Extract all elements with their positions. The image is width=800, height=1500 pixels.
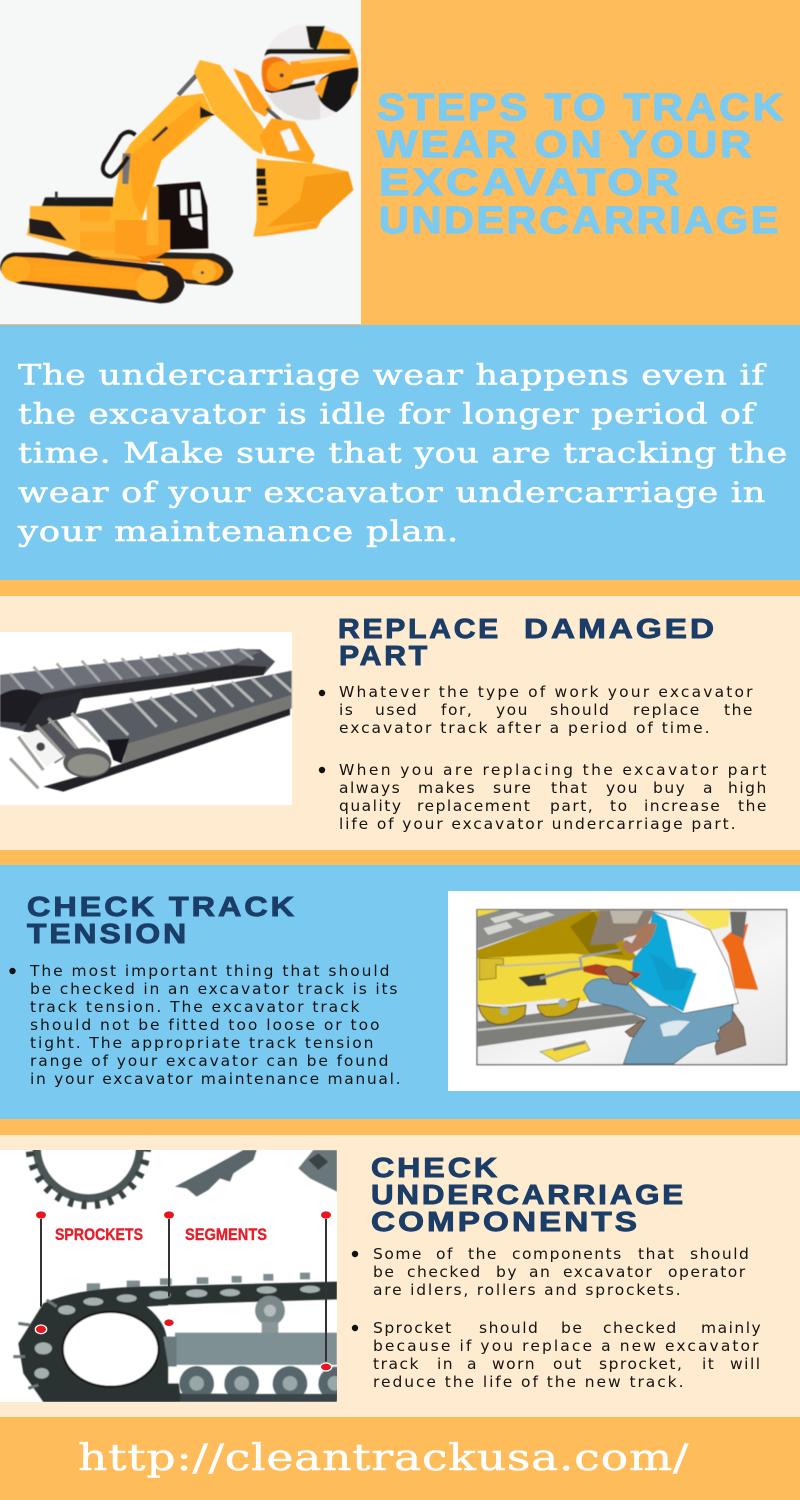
bullet list: because if you replace a new excavator — [373, 1337, 760, 1355]
bullet list: will — [730, 1355, 762, 1373]
bullet list: checked — [407, 1263, 482, 1281]
bullet list: Whatever the type of work your excavator — [339, 683, 754, 701]
panel: check undercarriage components — [0, 1088, 800, 1417]
bullet list: tight. The appropriate track tension — [30, 1034, 375, 1052]
bullet list: quality — [339, 797, 403, 815]
bullet list: is — [339, 701, 354, 719]
bullet list: used — [375, 701, 418, 719]
bullet list: always — [339, 779, 401, 797]
panel: header — [0, 0, 800, 325]
bullet list: high — [728, 779, 768, 797]
bullet list: excavator — [563, 1263, 653, 1281]
bullet list: mainly — [701, 1319, 762, 1337]
label: segments: SEGMENTS — [185, 1225, 267, 1244]
heading — [371, 1152, 686, 1237]
bullet list: components — [512, 1245, 623, 1263]
bullet list: reduce the life of the new track. — [373, 1373, 685, 1391]
bullet list: an — [529, 1263, 551, 1281]
bullet list — [9, 962, 402, 1088]
bullet list: you — [496, 701, 529, 719]
bullet list: range of your excavator can be found — [30, 1052, 390, 1070]
bullet list: excavator track after a period of time. — [339, 719, 711, 737]
bullet list: to — [610, 797, 629, 815]
bullet list: buy — [653, 779, 686, 797]
heading: COMPONENTS — [371, 1206, 640, 1237]
title: UNDERCARRIAGE — [379, 200, 781, 242]
bullet list: that — [638, 1245, 675, 1263]
panel: intro — [0, 325, 800, 580]
panel: replace damaged part — [0, 596, 800, 850]
intro text: the excavator is idle for longer period of — [18, 398, 757, 430]
bullet list: the — [468, 1245, 498, 1263]
bullet list: out — [553, 1355, 583, 1373]
bullet list: should not be fitted too loose or too — [30, 1016, 381, 1034]
label: sprockets: SPROCKETS — [55, 1225, 143, 1244]
bullet list: replacement — [417, 797, 531, 815]
bullet list: Some — [373, 1245, 423, 1263]
bullet list: sprocket, — [599, 1355, 683, 1373]
bullet list: by — [496, 1263, 518, 1281]
bullet list: The most important thing that should — [29, 962, 391, 980]
heading: PART — [339, 640, 430, 671]
title: WEAR ON YOUR — [377, 124, 754, 166]
image: mechanic greasing track — [448, 891, 800, 1091]
bullet list: in your excavator maintenance manual. — [30, 1070, 402, 1088]
bullet list: you — [606, 779, 639, 797]
title: STEPS TO TRACK — [377, 87, 786, 129]
bullet list: a — [467, 1355, 478, 1373]
intro text — [17, 358, 788, 548]
heading — [338, 613, 717, 671]
intro text: wear of your excavator undercarriage in — [18, 476, 766, 509]
panel: check track tension — [0, 865, 800, 1119]
bullet list: track tension. The excavator track — [30, 998, 361, 1016]
bullet list: be — [373, 1263, 395, 1281]
title: EXCAVATOR — [379, 162, 682, 204]
bullet list: increase — [644, 797, 721, 815]
intro text: time. Make sure that you are tracking the — [18, 436, 788, 470]
bullet list: are idlers, rollers and sprockets. — [373, 1281, 682, 1299]
bullet list: for, — [441, 701, 473, 719]
bullet list: it — [702, 1355, 715, 1373]
heading: DAMAGED — [524, 613, 717, 644]
heading: UNDERCARRIAGE — [371, 1179, 686, 1210]
intro text: The undercarriage wear happens even if — [18, 358, 768, 392]
heading: REPLACE — [338, 613, 501, 644]
heading: CHECK — [371, 1152, 500, 1183]
bullet list: checked — [603, 1319, 678, 1337]
image: toy excavator — [0, 0, 366, 324]
bullet list: sure — [493, 779, 532, 797]
bullet list: track — [373, 1355, 420, 1373]
heading: TENSION — [27, 918, 189, 949]
bullet list: be checked in an excavator track is its — [30, 980, 399, 998]
bullet list: life of your excavator undercarriage part. — [339, 815, 737, 833]
bullet list: makes — [418, 779, 476, 797]
bullet list: a — [703, 779, 714, 797]
bullet list: should — [690, 1245, 750, 1263]
bullet list: that — [551, 779, 588, 797]
bullet list: should — [479, 1319, 539, 1337]
bullet list: When you are replacing the excavator part — [339, 761, 768, 779]
image: sprockets and segments — [0, 1088, 352, 1402]
bullet list — [319, 683, 768, 833]
bullet list: in — [437, 1355, 454, 1373]
bullet list: worn — [492, 1355, 536, 1373]
bullet list: part, — [550, 797, 594, 815]
bullet list: the — [738, 797, 768, 815]
bullet list: be — [561, 1319, 583, 1337]
bullet list: the — [724, 701, 754, 719]
bullet list: Sprocket — [373, 1319, 453, 1337]
bullet list — [352, 1245, 762, 1391]
bullet list: replace — [633, 701, 701, 719]
footer url: http://cleantrackusa.com/ — [78, 1438, 689, 1479]
intro text: your maintenance plan. — [17, 515, 459, 548]
bullet list: should — [550, 701, 610, 719]
image: crawler track assembly — [0, 632, 292, 805]
bullet list: of — [436, 1245, 454, 1263]
heading: CHECK TRACK — [27, 891, 297, 922]
heading — [27, 891, 297, 949]
title — [377, 87, 786, 242]
bullet list: operator — [668, 1263, 747, 1281]
